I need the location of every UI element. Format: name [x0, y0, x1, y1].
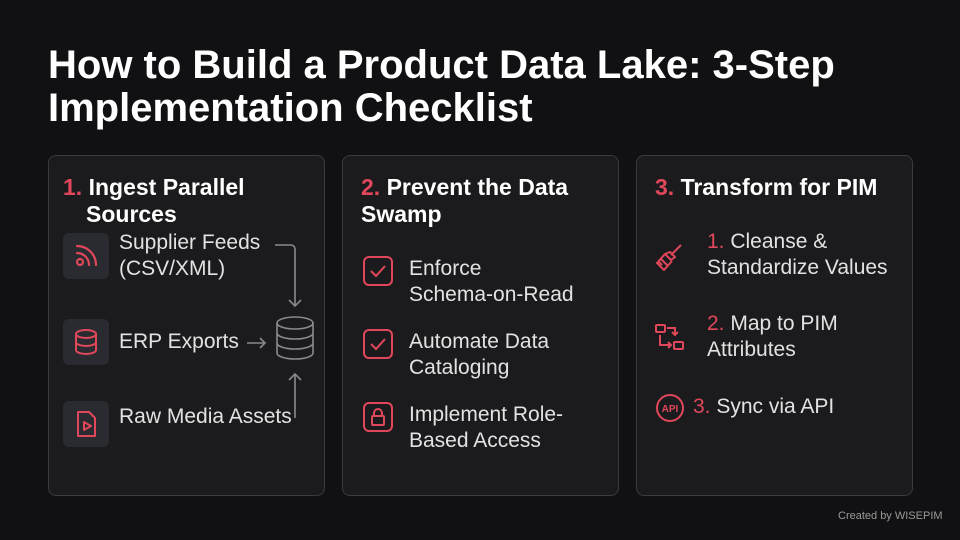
text enforce: Enforce — [409, 257, 481, 280]
text sync: 3. Sync via API — [693, 395, 834, 418]
heading 1: 1. Ingest Parallel — [63, 174, 245, 200]
text cleanse: Standardize Values — [707, 256, 888, 279]
text supplier: (CSV/XML) — [119, 257, 225, 280]
text raw media: Raw Media Assets — [119, 405, 292, 428]
text implement — [409, 403, 563, 452]
text map: Attributes — [707, 338, 796, 361]
icon: rss — [63, 233, 109, 279]
text supplier — [119, 231, 260, 280]
icon: map — [655, 324, 684, 350]
text implement: Implement Role- — [409, 403, 563, 426]
title: How to Build a Product Data Lake: 3-Step — [48, 43, 835, 87]
icon: api — [656, 394, 684, 422]
title — [48, 43, 835, 130]
panel: transform — [636, 155, 913, 496]
panel: ingest — [48, 155, 325, 496]
heading 1: Sources — [86, 201, 177, 227]
icon: media file — [63, 401, 109, 447]
heading 2 — [361, 174, 568, 227]
icon: api: API — [662, 404, 679, 415]
text automate: Automate Data — [409, 330, 549, 353]
heading 2: Swamp — [361, 201, 442, 227]
icon: check 1 — [363, 256, 393, 286]
footer credit: Created by WISEPIM — [838, 510, 943, 522]
heading 1 — [63, 174, 245, 227]
text supplier: Supplier Feeds — [119, 231, 260, 254]
icon: lock — [363, 402, 393, 432]
text map: 2. Map to PIM — [707, 312, 838, 335]
title: Implementation Checklist — [48, 86, 533, 130]
text erp: ERP Exports — [119, 330, 239, 353]
text implement: Based Access — [409, 429, 541, 452]
icon: check 2 — [363, 329, 393, 359]
text enforce: Schema-on-Read — [409, 283, 574, 306]
text map — [707, 312, 838, 361]
heading 3: 3. Transform for PIM — [655, 174, 877, 200]
arrows and data lake — [247, 244, 314, 418]
icon: brush — [656, 244, 682, 271]
text automate: Cataloging — [409, 356, 509, 379]
text automate — [409, 330, 550, 379]
text cleanse — [707, 230, 888, 279]
heading 2: 2. Prevent the Data — [361, 174, 568, 200]
icon: database small — [63, 319, 109, 365]
panel: swamp — [342, 155, 619, 496]
text enforce — [409, 257, 574, 306]
text cleanse: 1. Cleanse & — [707, 230, 827, 253]
